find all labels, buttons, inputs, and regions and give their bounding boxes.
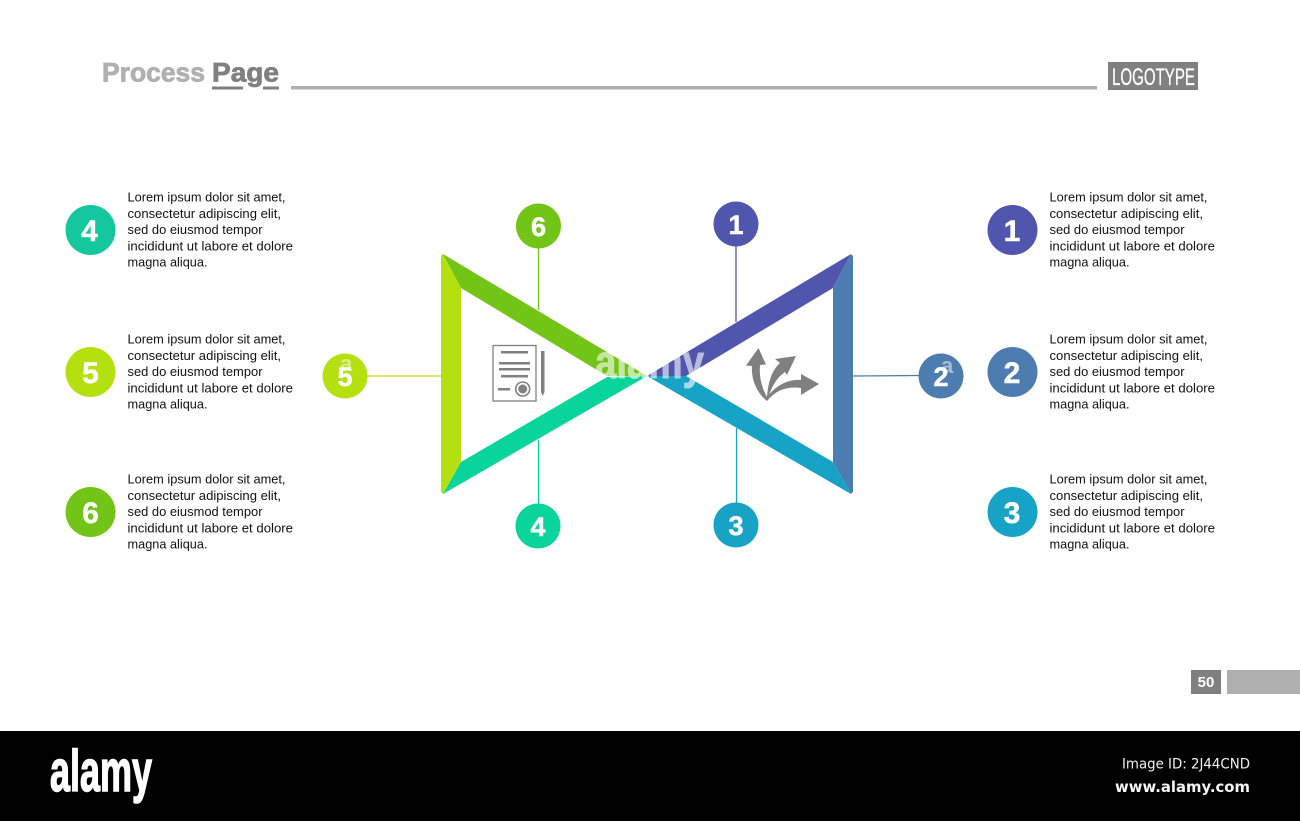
image id: Image ID: 2J44CND — [1122, 756, 1250, 772]
list item 2: sed do eiusmod tempor — [1050, 364, 1185, 379]
list item 6: Lorem ipsum dolor sit amet, — [128, 472, 286, 486]
list item 2: Lorem ipsum dolor sit amet, — [1050, 332, 1208, 346]
list item 2: incididunt ut labore et dolore — [1050, 380, 1215, 395]
list item 3: incididunt ut labore et dolore — [1050, 520, 1215, 535]
icon: branching arrows — [746, 348, 819, 401]
list item 3: sed do eiusmod tempor — [1050, 504, 1185, 519]
marker 3 — [714, 502, 758, 548]
bowtie diagram — [441, 254, 853, 494]
page number: 50 — [1198, 674, 1214, 691]
header — [102, 58, 1198, 91]
list item 4: 4 — [81, 215, 98, 248]
segment 5 left — [441, 254, 461, 494]
list item 3: Lorem ipsum dolor sit amet, — [1050, 472, 1208, 486]
marker 2 — [918, 353, 964, 398]
list item 2: 2 — [1004, 357, 1020, 390]
marker 2: 2 — [933, 362, 949, 392]
marker 1: 1 — [728, 210, 744, 240]
page number — [1191, 670, 1300, 694]
list item 6: consectetur adipiscing elit, — [128, 488, 281, 503]
segment 4 bottom left — [443, 376, 647, 494]
list item 4: magna aliqua. — [128, 254, 208, 270]
list item 5: incididunt ut labore et dolore — [128, 380, 293, 395]
list item 5 — [66, 332, 293, 412]
center watermark: alamy — [595, 335, 704, 388]
list item 6: 6 — [82, 497, 99, 530]
list item 5: consectetur adipiscing elit, — [128, 348, 281, 363]
marker 4: 4 — [530, 512, 546, 542]
list item 3 — [988, 472, 1215, 552]
segment 1 top right — [647, 254, 851, 376]
list item 4: sed do eiusmod tempor — [128, 222, 263, 237]
list item 1: incididunt ut labore et dolore — [1050, 238, 1215, 253]
marker 6 — [516, 204, 561, 248]
list item 4: Lorem ipsum dolor sit amet, — [128, 190, 286, 204]
list item 2: consectetur adipiscing elit, — [1050, 348, 1203, 363]
marker 5: 5 — [337, 362, 353, 392]
marker 6: 6 — [531, 212, 546, 242]
title — [102, 58, 279, 90]
list item 3: magna aliqua. — [1050, 536, 1130, 552]
marker 5 — [322, 351, 368, 398]
list item 1 — [988, 190, 1215, 270]
list item 1: 1 — [1004, 215, 1020, 248]
title: Process — [102, 58, 205, 88]
alamy logo: alamy — [50, 739, 152, 804]
list item 6: magna aliqua. — [128, 536, 208, 552]
list item 4: consectetur adipiscing elit, — [128, 206, 281, 221]
list item 3: 3 — [1004, 497, 1020, 530]
list item 5: sed do eiusmod tempor — [128, 364, 263, 379]
list item 5: Lorem ipsum dolor sit amet, — [128, 332, 286, 346]
list item 1: magna aliqua. — [1050, 254, 1130, 270]
marker 2: a — [941, 353, 954, 378]
list item 1: Lorem ipsum dolor sit amet, — [1050, 190, 1208, 204]
segment 2 right — [833, 254, 853, 494]
segment 6 top left — [443, 254, 647, 376]
site url: www.alamy.com — [1115, 778, 1250, 796]
list item 5: 5 — [82, 357, 99, 390]
list item 2: magna aliqua. — [1050, 396, 1130, 412]
logotype: LOGOTYPE — [1112, 64, 1195, 91]
logotype — [1108, 62, 1198, 91]
title: Page — [212, 58, 279, 88]
list item 1: sed do eiusmod tempor — [1050, 222, 1185, 237]
segment 3 bottom right — [647, 376, 851, 494]
icon: document — [493, 346, 544, 401]
list item 4: incididunt ut labore et dolore — [128, 238, 293, 253]
list item 3: consectetur adipiscing elit, — [1050, 488, 1203, 503]
list item 4 — [66, 190, 293, 270]
marker 5: a — [340, 351, 353, 376]
list item 5: magna aliqua. — [128, 396, 208, 412]
list item 6: sed do eiusmod tempor — [128, 504, 263, 519]
list item 6 — [66, 472, 293, 552]
marker 3: 3 — [728, 511, 744, 541]
list item 1: consectetur adipiscing elit, — [1050, 206, 1203, 221]
footer band — [0, 731, 1300, 821]
connector lines — [367, 246, 920, 505]
list item 6: incididunt ut labore et dolore — [128, 520, 293, 535]
list item 2 — [988, 332, 1215, 412]
marker 1 — [714, 202, 758, 246]
marker 4 — [516, 504, 560, 548]
